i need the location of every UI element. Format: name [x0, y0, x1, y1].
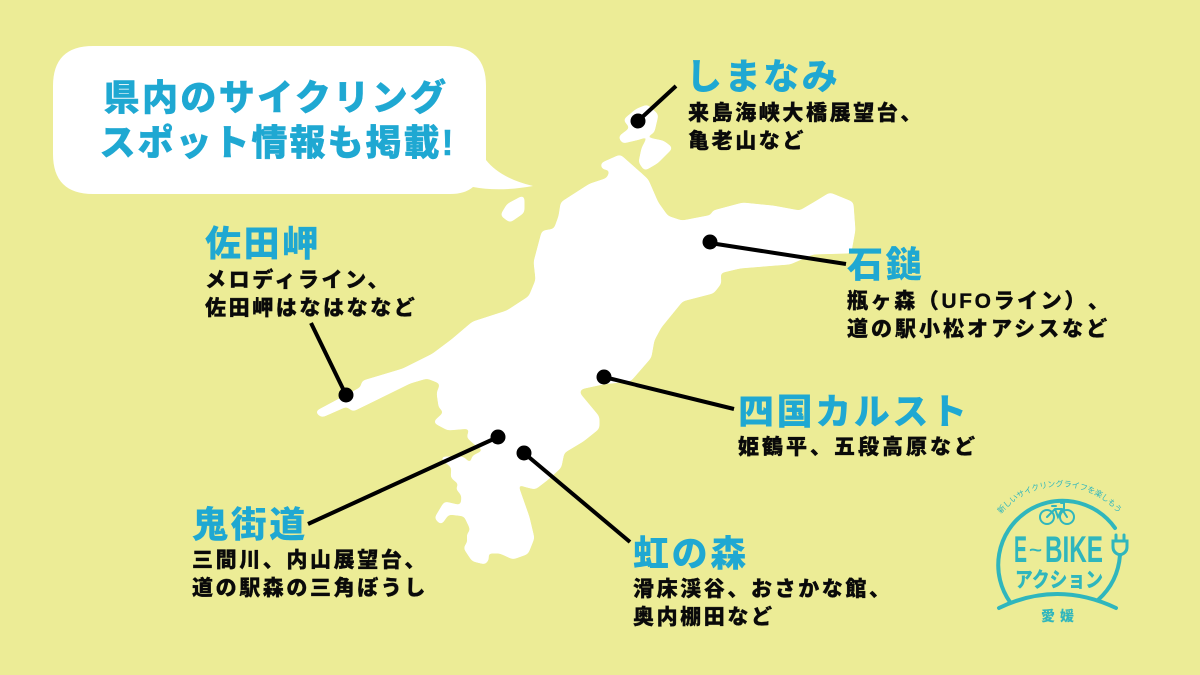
details: Ishizuchi: 瓶ヶ森（UFOライン）、 — [847, 290, 1112, 313]
details: Sadamisaki — [205, 268, 417, 320]
details: Shimanami — [688, 101, 924, 152]
details: Oni Kaido: 三間川、内山展望台、 — [192, 549, 428, 572]
details: Ishizuchi — [847, 290, 1112, 340]
details: Shikoku Karst: 姫鶴平、五段高原など — [738, 436, 978, 459]
details: Sadamisaki: 佐田岬はなはななど — [205, 296, 417, 320]
bubble title — [100, 77, 456, 163]
logo katakana: アクション — [1015, 569, 1103, 592]
bubble title: スポット情報も掲載! — [100, 122, 456, 163]
label: Ishizuchi: 石鎚 — [847, 244, 924, 285]
label: Niji no Mori: 虹の森 — [633, 533, 749, 574]
logo wordmark: BIKE — [1045, 529, 1103, 570]
label: Oni Kaido: 鬼街道 — [192, 504, 308, 545]
label: Sadamisaki: 佐田岬 — [205, 223, 321, 264]
details: Oni Kaido: 道の駅森の三角ぼうし — [192, 576, 428, 600]
details: Oni Kaido — [192, 548, 428, 600]
label: Shikoku Karst: 四国カルスト — [738, 391, 970, 432]
details: Shimanami: 来島海峡大橋展望台、 — [688, 102, 924, 125]
logo wordmark: E — [1014, 529, 1027, 570]
label: Shimanami: しまなみ — [686, 56, 840, 97]
leader lines and location dots — [308, 86, 846, 542]
details: Shimanami: 亀老山など — [688, 130, 806, 152]
bubble title: 県内のサイクリング — [104, 77, 448, 118]
icon: bicycle — [1040, 503, 1074, 524]
logo ring — [998, 501, 1115, 602]
details: Niji no Mori: 奥内棚田など — [633, 606, 775, 628]
details: Ishizuchi: 道の駅小松オアシスなど — [847, 318, 1110, 340]
logo wordmark: ~ — [1029, 540, 1042, 560]
logo region: 愛媛 — [1041, 608, 1074, 624]
details: Niji no Mori: 滑床渓谷、おさかな館、 — [633, 578, 893, 601]
logo ground arc — [999, 594, 1116, 608]
logo tagline: 新しいサイクリングライフを楽しもう — [997, 480, 1122, 514]
details: Niji no Mori — [633, 578, 893, 628]
logo wordmark — [1014, 529, 1103, 570]
icon: plug — [1113, 541, 1127, 555]
map: Ehime prefecture — [317, 106, 854, 563]
details: Sadamisaki: メロディライン、 — [205, 269, 391, 292]
